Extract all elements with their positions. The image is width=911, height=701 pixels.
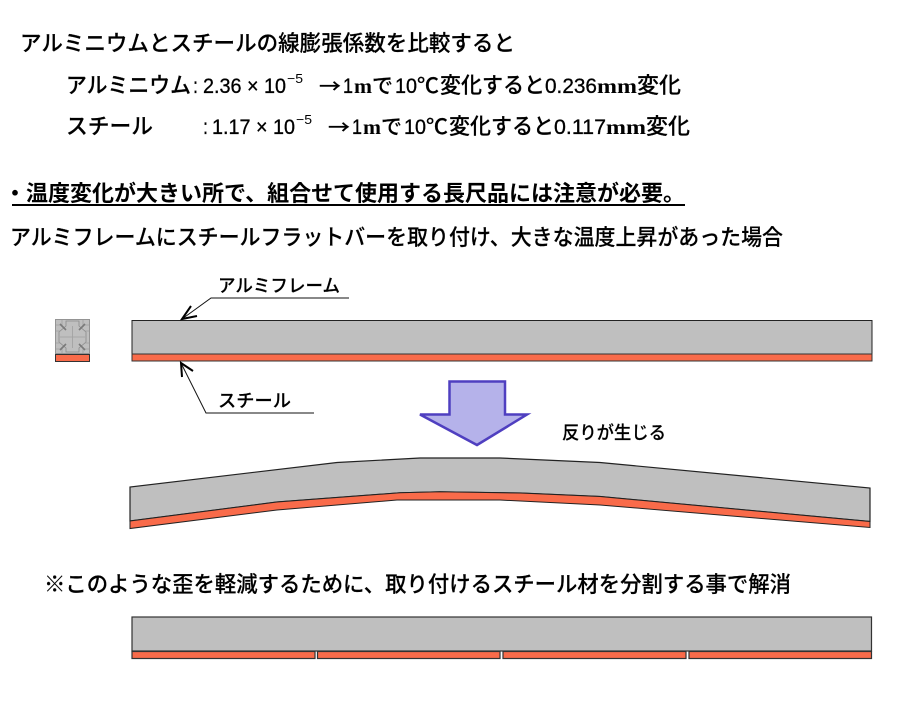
text: aluminium coefficient: mm	[597, 74, 638, 98]
text: aluminium coefficient: m	[354, 74, 373, 98]
text: steel coefficient: m	[363, 115, 382, 139]
text: aluminium coefficient: アルミニウム	[66, 68, 191, 100]
text: steel coefficient: 変化	[646, 109, 690, 141]
text: steel coefficient: ℃	[426, 111, 448, 141]
diagram: frame with divided steel bars	[132, 617, 872, 658]
warning: long parts caution, underlined: ・温度変化が大きい所で、組合せて使用する長尺品には注意が必要。	[4, 176, 685, 208]
text: steel coefficient: 変化すると	[449, 109, 554, 141]
text: aluminium coefficient: 0.236	[545, 75, 597, 98]
text: aluminium coefficient: 10	[395, 75, 417, 98]
label: warping occurs: 反りが生じる	[562, 419, 666, 445]
text: aluminium coefficient: で	[372, 70, 393, 100]
text: aluminium coefficient: 1	[343, 75, 353, 98]
text: aluminium coefficient: :	[193, 75, 198, 98]
diagram: straight frame with steel bar	[132, 320, 872, 361]
text: steel coefficient: 0.117	[554, 116, 606, 139]
text: steel coefficient: :	[203, 116, 208, 139]
text: steel coefficient: スチール	[66, 109, 153, 141]
text: steel coefficient: −5	[296, 112, 312, 127]
label: steel with leader arrow	[181, 363, 314, 413]
label: aluminium frame with leader arrow: アルミフレーム	[218, 272, 340, 298]
text: steel coefficient: →	[328, 113, 350, 140]
heading: comparison intro: アルミニウムとスチールの線膨張係数を比較すると	[20, 26, 515, 58]
diagram: warped frame	[130, 458, 870, 528]
label: aluminium frame with leader arrow	[182, 272, 349, 319]
icon: frame cross-section	[55, 319, 90, 362]
text: steel coefficient: 10	[404, 116, 426, 139]
text: aluminium coefficient	[66, 68, 681, 100]
text: aluminium coefficient: ℃	[417, 70, 439, 100]
text: steel coefficient: で	[381, 111, 402, 141]
text: steel coefficient: mm	[606, 115, 647, 139]
text: aluminium coefficient: −5	[287, 71, 303, 86]
arrow: down block arrow	[420, 382, 527, 445]
text: aluminium coefficient: 変化	[637, 68, 681, 100]
text: steel coefficient	[66, 109, 690, 141]
note: solution by dividing steel: ※このような歪を軽減するために、取り付けるスチール材を分割する事で解消	[44, 567, 791, 599]
text: aluminium coefficient: 変化すると	[440, 68, 545, 100]
text: frame condition: アルミフレームにスチールフラットバーを取り付け、大きな温度上昇があった場合	[10, 220, 783, 252]
text: aluminium coefficient: 2.36 × 10	[203, 75, 286, 98]
text: steel coefficient: 1	[352, 116, 362, 139]
text: steel coefficient: 1.17 × 10	[212, 116, 295, 139]
label: steel with leader arrow: スチール	[218, 387, 291, 413]
text: aluminium coefficient: →	[319, 72, 341, 99]
